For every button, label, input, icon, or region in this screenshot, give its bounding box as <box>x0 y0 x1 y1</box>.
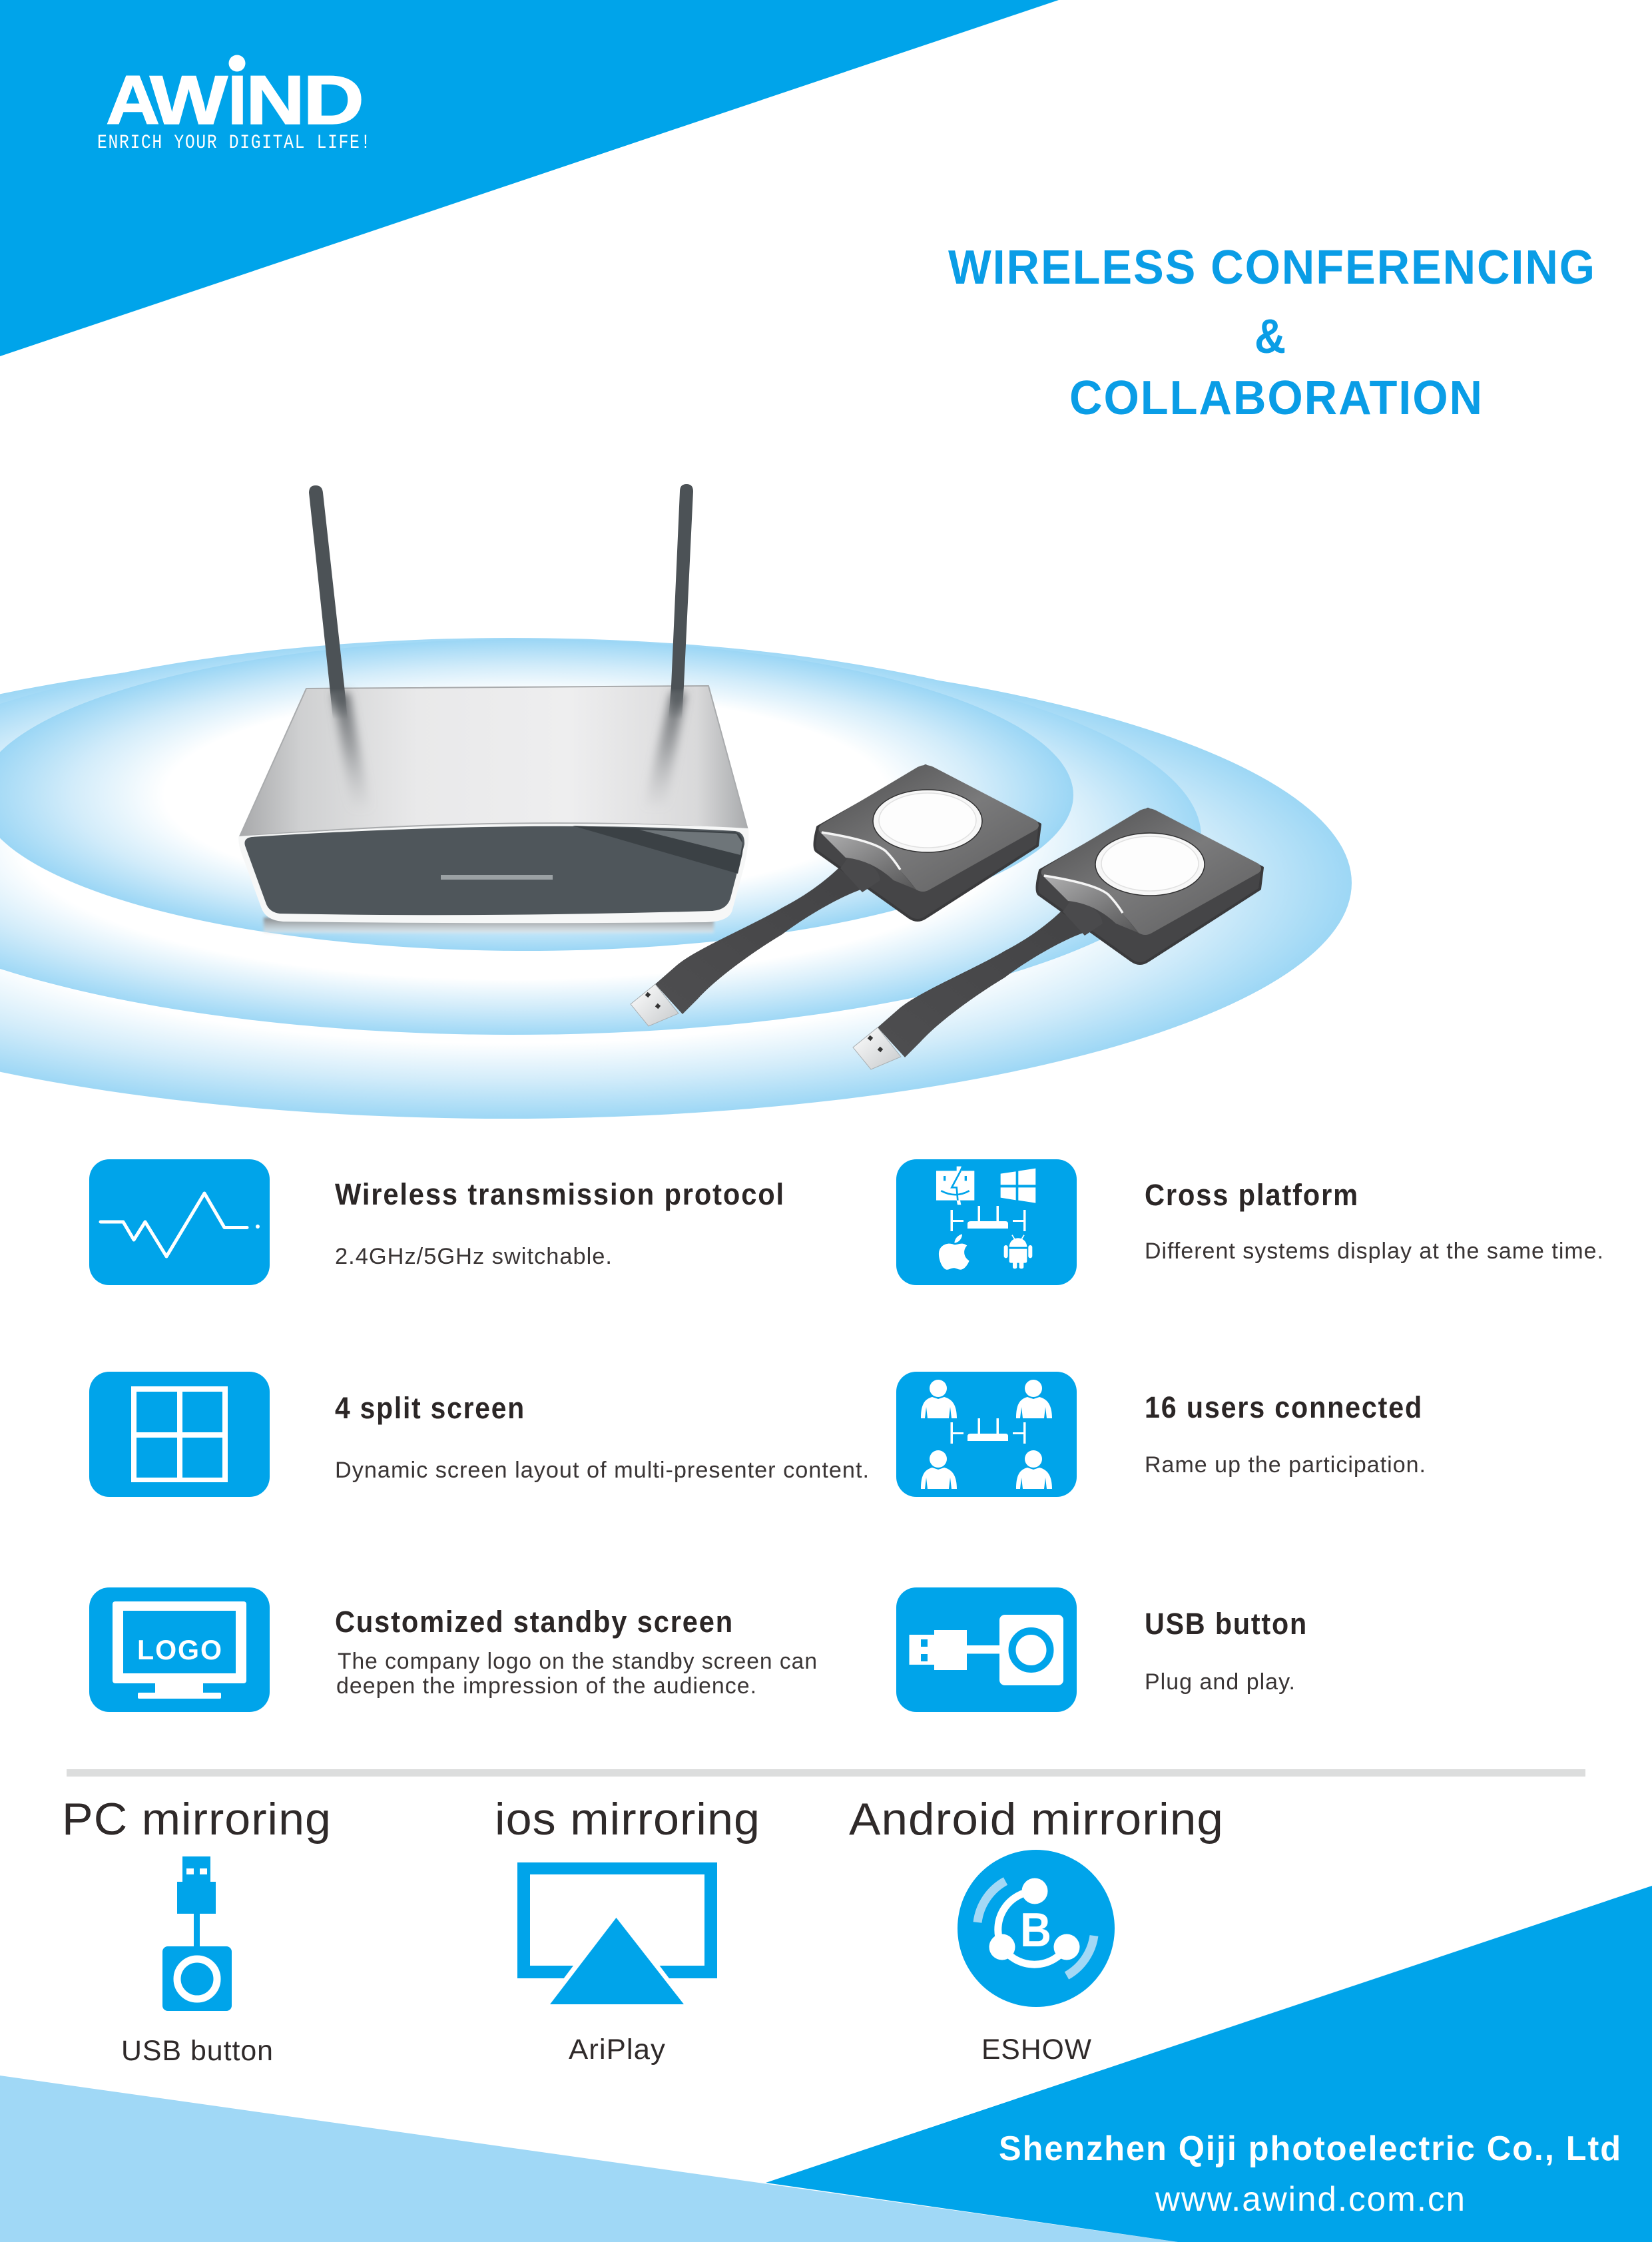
heading: ios mirroring <box>495 1794 760 1844</box>
icon: ESHOW: B <box>1020 1904 1051 1957</box>
dark front panel <box>244 826 744 915</box>
feature: cross platform <box>896 1159 1604 1285</box>
silver wedge with white curve <box>1043 876 1139 933</box>
feature: 16 users connected <box>896 1372 1426 1497</box>
heading: 4 split screen <box>335 1391 525 1425</box>
android logo <box>1004 1235 1032 1268</box>
upper face <box>818 765 1039 892</box>
title: & <box>1254 310 1287 364</box>
heading: Wireless transmission protocol <box>335 1177 785 1211</box>
panel: ios mirroring <box>495 1794 760 2066</box>
lower body <box>1037 809 1262 964</box>
top silver surface <box>240 686 748 836</box>
heading: Cross platform <box>1145 1178 1359 1212</box>
description: 2.4GHz/5GHz switchable. <box>335 1244 613 1269</box>
description: The company logo on the standby screen can <box>338 1649 818 1674</box>
cable <box>655 860 880 1014</box>
feature: wireless transmission protocol <box>89 1159 785 1285</box>
icon: AirPlay <box>517 1862 717 2011</box>
highlight curve <box>1044 876 1123 913</box>
description <box>336 1649 818 1699</box>
feature: 4 split screen <box>89 1372 870 1497</box>
icon: monitor with logo <box>89 1587 270 1712</box>
button inner <box>1101 836 1199 891</box>
panel reflection dark band <box>573 826 743 874</box>
logo tagline: ENRICH YOUR DIGITAL LIFE! <box>97 132 372 154</box>
heading: 16 users connected <box>1145 1390 1423 1424</box>
feature: USB button <box>896 1587 1308 1712</box>
title: COLLABORATION <box>1069 372 1484 425</box>
product: USB button dongle 1 <box>631 765 1040 1026</box>
finder logo <box>936 1167 974 1205</box>
icon: four pane grid <box>89 1372 270 1497</box>
divider <box>67 1769 1585 1777</box>
lower body <box>814 766 1040 920</box>
feature: customized standby screen <box>89 1587 818 1712</box>
button inner <box>879 793 976 848</box>
product: USB button dongle 2 <box>853 808 1262 1069</box>
USB plug <box>853 1027 901 1069</box>
icon: users around router <box>896 1372 1077 1497</box>
footer: website: www.awind.com.cn <box>1155 2180 1466 2219</box>
description: deepen the impression of the audience. <box>336 1673 757 1699</box>
plug hole 1 <box>868 1035 873 1041</box>
plug hole 2 <box>655 1003 661 1009</box>
description: Rame up the participation. <box>1145 1452 1426 1478</box>
button outer <box>1095 833 1205 896</box>
background: bottom-right blue triangle <box>766 1886 1652 2242</box>
title: WIRELESS CONFERENCING <box>948 241 1596 294</box>
panel reflection highlight <box>639 830 742 855</box>
front white rim <box>238 824 748 923</box>
antenna shadows <box>333 693 686 809</box>
users <box>921 1380 1052 1489</box>
logo: AWIND: W <box>150 62 228 139</box>
router glyph <box>951 1206 1025 1231</box>
heading: Android mirroring <box>849 1794 1224 1844</box>
plug hole 1 <box>645 992 651 997</box>
panel: Android mirroring <box>849 1794 1224 2066</box>
logo: AWIND: I <box>228 62 247 139</box>
cable <box>878 904 1103 1057</box>
icon: operating systems and router <box>896 1159 1077 1285</box>
icon: ESHOW <box>958 1850 1115 2007</box>
description: Dynamic screen layout of multi-presenter content. <box>335 1458 870 1483</box>
antenna right <box>669 484 693 719</box>
icon: waveform <box>89 1159 270 1285</box>
description: Different systems display at the same time. <box>1145 1239 1604 1264</box>
under shadow <box>264 918 714 933</box>
wireless signal rings <box>0 638 1352 1119</box>
caption: USB button <box>121 2035 274 2067</box>
antenna left <box>309 485 348 719</box>
logo: AWIND: N <box>246 62 305 139</box>
background: top-left blue triangle <box>0 0 1059 356</box>
highlight curve <box>822 832 900 870</box>
plug hole 2 <box>878 1047 883 1052</box>
description: Plug and play. <box>1145 1669 1296 1695</box>
cable neck <box>1063 900 1103 936</box>
USB plug <box>631 984 679 1026</box>
icon: vertical USB button <box>162 1856 232 2011</box>
cable neck <box>840 857 880 892</box>
logo: AWIND <box>106 55 364 139</box>
front slot <box>441 875 553 880</box>
upper face <box>1041 808 1261 935</box>
footer: company name: Shenzhen Qiji photoelectric Co., Ltd <box>999 2129 1622 2168</box>
panel: PC mirroring <box>62 1794 332 2067</box>
silver wedge with white curve <box>820 832 916 890</box>
heading: USB button <box>1145 1607 1308 1641</box>
logo: AWIND: D <box>303 62 364 139</box>
icon: monitor with logo: LOGO <box>137 1634 223 1665</box>
heading: PC mirroring <box>62 1794 332 1844</box>
background: bottom-left pale blue triangle <box>0 2076 1178 2242</box>
icon: USB plug and button <box>896 1587 1077 1712</box>
logo: AWIND: A <box>106 62 160 139</box>
windows logo <box>1001 1169 1035 1203</box>
title <box>948 241 1596 425</box>
apple logo <box>939 1234 969 1270</box>
product: wireless base unit with antennas <box>238 484 748 933</box>
caption: ESHOW <box>981 2034 1092 2066</box>
caption: AriPlay <box>569 2034 666 2066</box>
button outer <box>873 790 982 852</box>
router glyph <box>951 1418 1025 1444</box>
heading: Customized standby screen <box>335 1605 734 1639</box>
